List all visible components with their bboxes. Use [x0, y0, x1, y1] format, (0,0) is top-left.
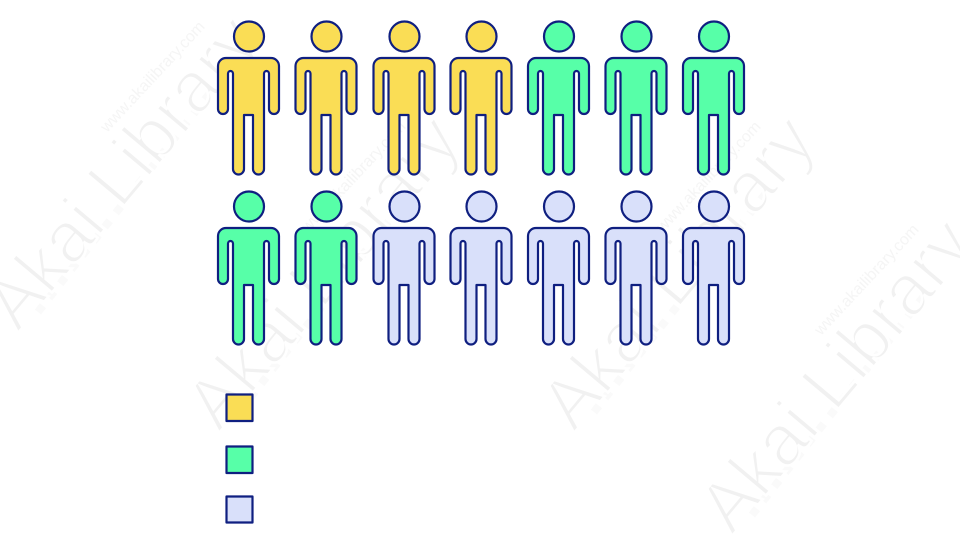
person 13 lavender: [606, 192, 666, 344]
person 8 green: [218, 192, 279, 344]
person 3 yellow: [374, 22, 434, 174]
person 2 yellow: [296, 22, 356, 174]
legend: [226, 394, 252, 522]
person 11 lavender: [450, 192, 512, 344]
pictogram row 1: [218, 22, 744, 174]
person 6 green: [606, 22, 666, 174]
person 5 green: [528, 22, 589, 174]
legend swatch lavender: [226, 496, 252, 522]
legend swatch yellow: [226, 394, 252, 421]
person 1 yellow: [218, 22, 279, 174]
legend swatch green: [226, 446, 252, 473]
person 10 lavender: [374, 192, 434, 344]
pictogram row 2: [218, 192, 744, 344]
person 7 green: [683, 22, 744, 174]
person 12 lavender: [528, 192, 589, 344]
person 14 lavender: [683, 192, 744, 344]
person 4 yellow: [450, 22, 512, 174]
person 9 green: [296, 192, 356, 344]
